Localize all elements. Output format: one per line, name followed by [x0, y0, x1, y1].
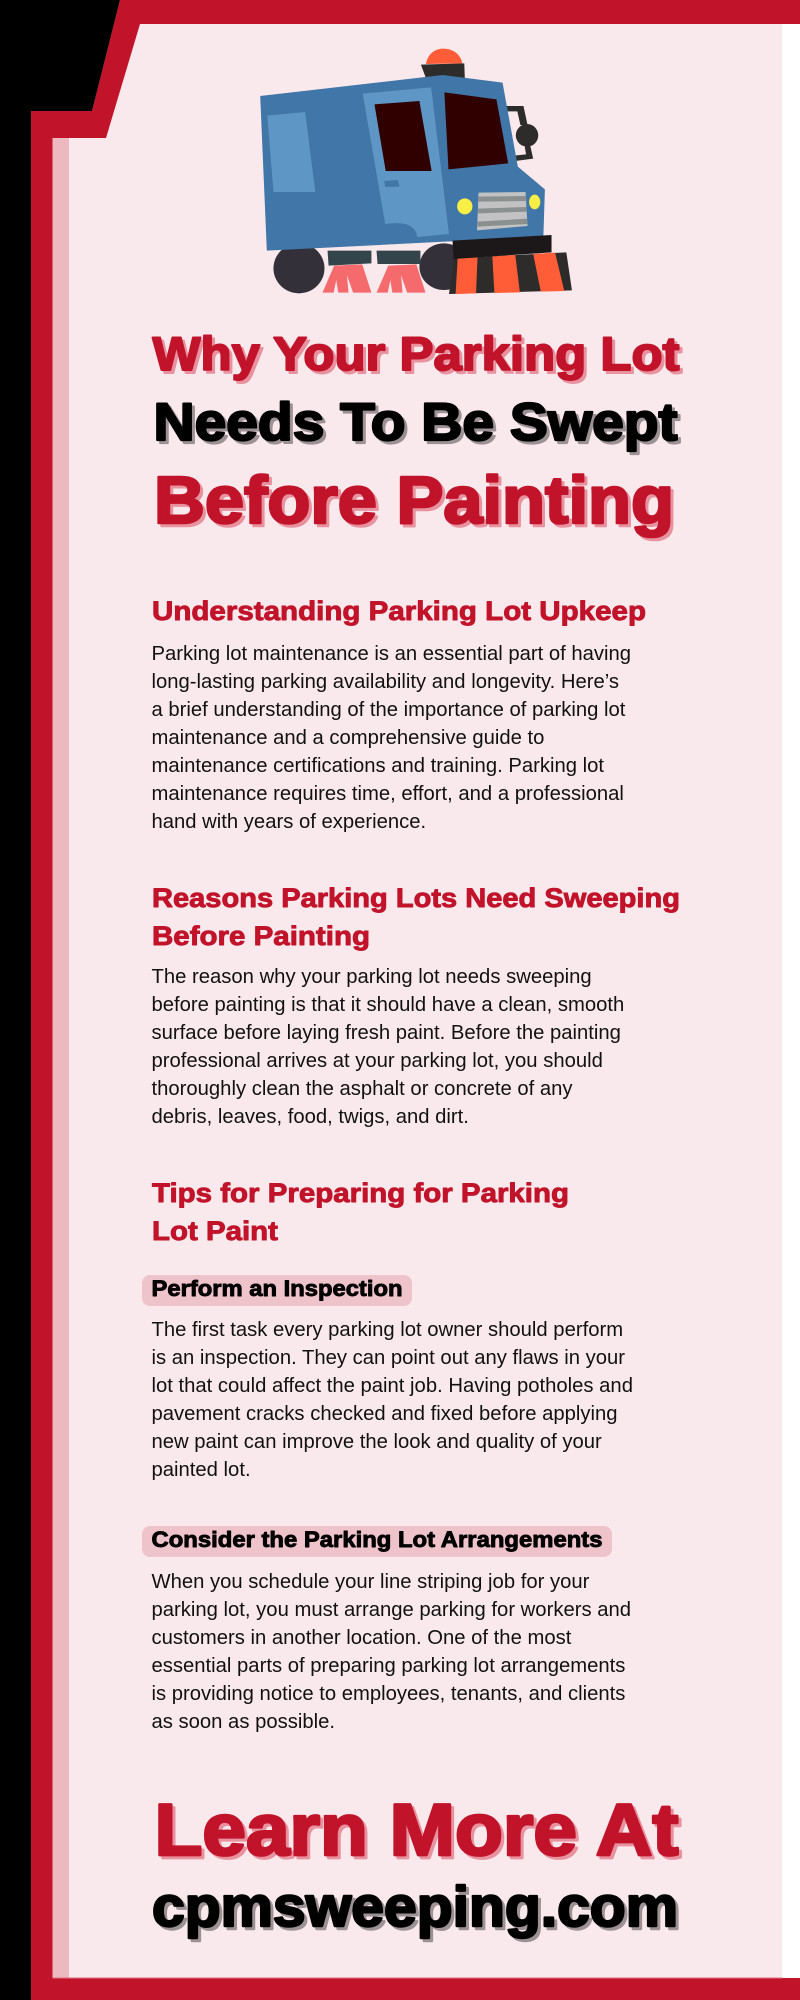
text block: arrangements paragraph: essential parts of preparing parking lot arrangements	[152, 1655, 625, 1677]
text block: inspection paragraph: lot that could affect the paint job. Having potholes and	[152, 1375, 633, 1397]
icon: wheels	[273, 243, 468, 293]
heading: reasons for sweeping: Before Painting	[152, 921, 370, 951]
text block: arrangements paragraph	[152, 1571, 631, 1733]
text block: inspection paragraph: painted lot.	[152, 1459, 251, 1481]
text block: arrangements paragraph: When you schedule your line striping job for your	[152, 1571, 590, 1593]
text block: arrangements paragraph: is providing notice to employees, tenants, and clients	[152, 1683, 625, 1705]
title line 3: Before Painting	[154, 463, 674, 538]
text block: upkeep paragraph: maintenance requires time, effort, and a professional	[152, 783, 624, 805]
text block: upkeep paragraph	[152, 643, 631, 833]
title line 2: Needs To Be Swept	[154, 393, 678, 452]
heading: tips for preparing: Lot Paint	[152, 1216, 278, 1246]
icon: side mirror	[506, 106, 538, 161]
icon: front broom	[449, 235, 572, 294]
text block: upkeep paragraph: long-lasting parking availability and longevity. Here’s	[152, 671, 619, 693]
text block: inspection paragraph: pavement cracks checked and fixed before applying	[152, 1403, 618, 1425]
title line 1: Why Your Parking Lot	[152, 327, 680, 380]
icon: headlights	[457, 195, 540, 214]
text block: reasons paragraph: professional arrives at your parking lot, you should	[152, 1050, 603, 1072]
icon: side panel	[267, 112, 315, 192]
website url: cpmsweeping.com	[152, 1875, 678, 1939]
text block: reasons paragraph: before painting is that it should have a clean, smooth	[152, 994, 624, 1016]
heading: tips for preparing: Tips for Preparing for Parking	[152, 1178, 569, 1208]
text block: reasons paragraph	[152, 966, 624, 1128]
subheading: parking lot arrangements: Consider the Parking Lot Arrangements	[152, 1527, 602, 1552]
text block: inspection paragraph: The first task every parking lot owner should perform	[152, 1319, 623, 1341]
text block: inspection paragraph	[152, 1319, 633, 1481]
text block: upkeep paragraph: hand with years of experience.	[152, 811, 426, 833]
subheading: perform an inspection: Perform an Inspection	[152, 1276, 402, 1301]
text block: arrangements paragraph: as soon as possible.	[152, 1711, 335, 1733]
text block: inspection paragraph: is an inspection. They can point out any flaws in your	[152, 1347, 625, 1369]
heading: reasons for sweeping: Reasons Parking Lots Need Sweeping	[152, 883, 680, 913]
heading: understanding upkeep: Understanding Parking Lot Upkeep	[152, 596, 646, 626]
text block: upkeep paragraph: maintenance certifications and training. Parking lot	[152, 755, 604, 777]
icon: street sweeper truck	[260, 49, 572, 294]
icon: door	[363, 87, 449, 237]
text block: upkeep paragraph: maintenance and a comprehensive guide to	[152, 727, 544, 749]
text block: reasons paragraph: surface before laying fresh paint. Before the painting	[152, 1022, 621, 1044]
icon: side brushes	[322, 251, 426, 293]
call to action	[152, 1790, 678, 1939]
icon: beacon light	[421, 49, 465, 78]
heading: tips for preparing	[152, 1178, 569, 1246]
call to action heading: Learn More At	[154, 1790, 678, 1871]
icon: grille	[477, 192, 528, 230]
heading: reasons for sweeping	[152, 883, 680, 951]
text block: upkeep paragraph: Parking lot maintenance is an essential part of having	[152, 643, 631, 665]
text block: reasons paragraph: debris, leaves, food, twigs, and dirt.	[152, 1106, 469, 1128]
text block: upkeep paragraph: a brief understanding of the importance of parking lot	[152, 699, 626, 721]
icon: truck body	[260, 75, 545, 251]
text block: reasons paragraph: The reason why your parking lot needs sweeping	[152, 966, 592, 988]
text block: arrangements paragraph: parking lot, you must arrange parking for workers and	[152, 1599, 631, 1621]
text block: arrangements paragraph: customers in another location. One of the most	[152, 1627, 572, 1649]
text block: inspection paragraph: new paint can improve the look and quality of your	[152, 1431, 602, 1453]
text block: reasons paragraph: thoroughly clean the asphalt or concrete of any	[152, 1078, 573, 1100]
subheading: perform an inspection	[142, 1275, 412, 1306]
title	[152, 327, 680, 538]
icon: windshield	[444, 92, 508, 169]
